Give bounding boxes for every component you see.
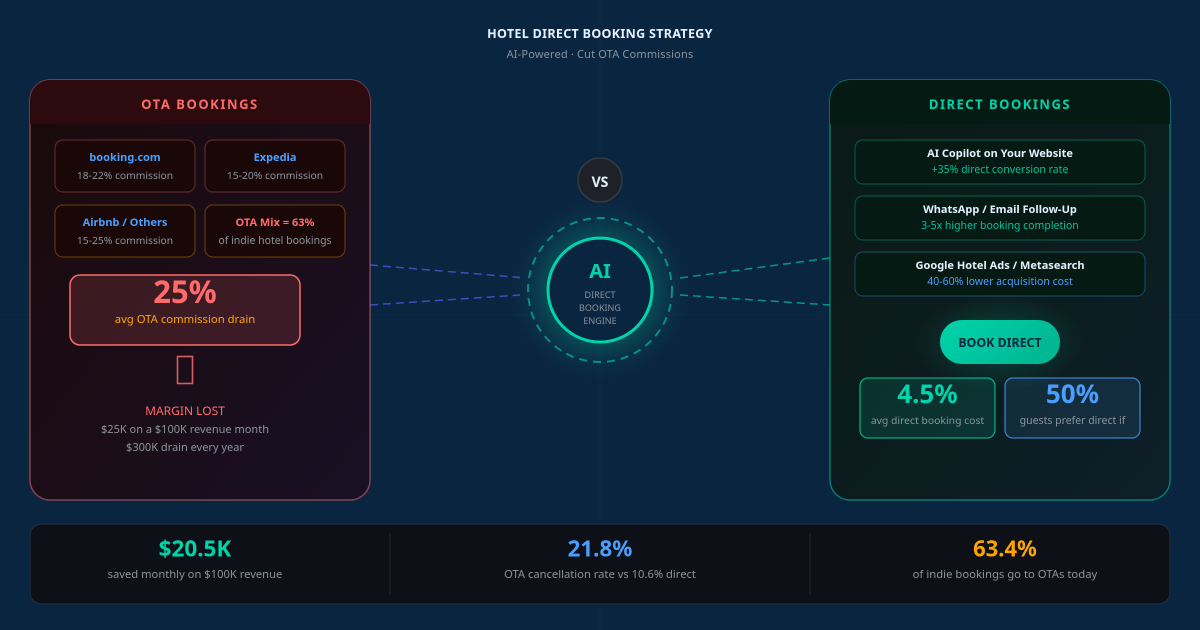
- callout: 25 percent commission drain: [70, 271, 300, 345]
- panel: direct bookings: [830, 80, 1170, 500]
- stat: guests prefer direct: guests prefer direct if: [1020, 414, 1127, 428]
- text block: margin lost: $25K on a $100K revenue month: [101, 422, 269, 437]
- card: OTA mix: OTA Mix = 63%: [236, 215, 315, 230]
- AI direct booking engine: AI: [589, 257, 611, 284]
- stat: monthly saving: saved monthly on $100K revenue: [108, 567, 282, 582]
- badge: VS: VS: [592, 173, 609, 192]
- button: book direct: BOOK DIRECT: [958, 334, 1042, 351]
- card: Google Hotel Ads: Google Hotel Ads / Metasearch: [915, 258, 1085, 273]
- stat: OTA share: 63.4%: [973, 534, 1037, 564]
- stat: direct booking cost: 4.5%: [897, 375, 958, 411]
- title: [487, 25, 713, 62]
- card: AI copilot: AI Copilot on Your Website: [927, 146, 1073, 161]
- card: WhatsApp and email: 3-5x higher booking completion: [921, 219, 1079, 233]
- stat: guests prefer direct: [1005, 375, 1140, 438]
- text block: margin lost: $300K drain every year: [126, 440, 244, 455]
- panel header: direct bookings: DIRECT BOOKINGS: [929, 95, 1071, 113]
- card: Expedia: 15-20% commission: [227, 169, 323, 183]
- stat: direct booking cost: avg direct booking cost: [871, 414, 984, 428]
- subtitle: AI-Powered · Cut OTA Commissions: [507, 47, 693, 62]
- panel header: direct bookings: [830, 80, 1170, 124]
- card: WhatsApp and email: [855, 196, 1145, 240]
- stat: monthly saving: $20.5K: [159, 532, 231, 564]
- text block: margin lost: MARGIN LOST: [145, 402, 225, 419]
- connector: AI engine to direct: [680, 258, 830, 305]
- panel header: OTA bookings: OTA BOOKINGS: [141, 95, 259, 113]
- button: book direct: [915, 294, 1085, 390]
- card: booking.com: booking.com: [89, 150, 161, 165]
- stat: guests prefer direct: 50%: [1046, 375, 1099, 411]
- card: Expedia: Expedia: [254, 150, 296, 165]
- card: Google Hotel Ads: [855, 252, 1145, 296]
- card: booking.com: [55, 140, 195, 192]
- heading: HOTEL DIRECT BOOKING STRATEGY: [487, 25, 713, 42]
- stat: OTA share: [913, 534, 1098, 582]
- stat: cancellation rate: [504, 532, 696, 582]
- AI direct booking engine: DIRECT: [585, 288, 615, 301]
- card: AI copilot: [855, 140, 1145, 184]
- panel: OTA bookings: [30, 80, 370, 500]
- callout: 25 percent commission drain: 25%: [153, 271, 217, 313]
- text block: margin lost: [101, 402, 269, 455]
- card: Airbnb and others: 15-25% commission: [77, 234, 173, 248]
- card: Expedia: [205, 140, 345, 192]
- card: OTA mix: of indie hotel bookings: [218, 234, 332, 248]
- stat: cancellation rate: 21.8%: [568, 532, 632, 564]
- bottom stats bar: [30, 524, 1170, 604]
- AI direct booking engine: [510, 200, 690, 380]
- card: booking.com: 18-22% commission: [77, 169, 173, 183]
- card: Google Hotel Ads: 40-60% lower acquisition cost: [927, 275, 1073, 289]
- card: AI copilot: +35% direct conversion rate: [932, 163, 1068, 177]
- card: WhatsApp and email: WhatsApp / Email Follow-Up: [923, 202, 1077, 217]
- icon: missing glyph box: [178, 356, 192, 384]
- card: Airbnb and others: Airbnb / Others: [83, 215, 168, 230]
- stat: cancellation rate: OTA cancellation rate vs 10.6% direct: [504, 567, 696, 582]
- card: Airbnb and others: [55, 205, 195, 257]
- AI direct booking engine: ENGINE: [583, 314, 617, 327]
- badge: VS: [578, 158, 622, 202]
- stat: OTA share: of indie bookings go to OTAs today: [913, 567, 1098, 582]
- stat: direct booking cost: [860, 375, 995, 438]
- card: OTA mix: [205, 205, 345, 257]
- connector: OTA to AI engine: [370, 265, 520, 305]
- stat: monthly saving: [108, 532, 282, 582]
- panel header: OTA bookings: [30, 80, 370, 124]
- AI direct booking engine: BOOKING: [579, 301, 621, 314]
- callout: 25 percent commission drain: avg OTA commission drain: [115, 312, 255, 327]
